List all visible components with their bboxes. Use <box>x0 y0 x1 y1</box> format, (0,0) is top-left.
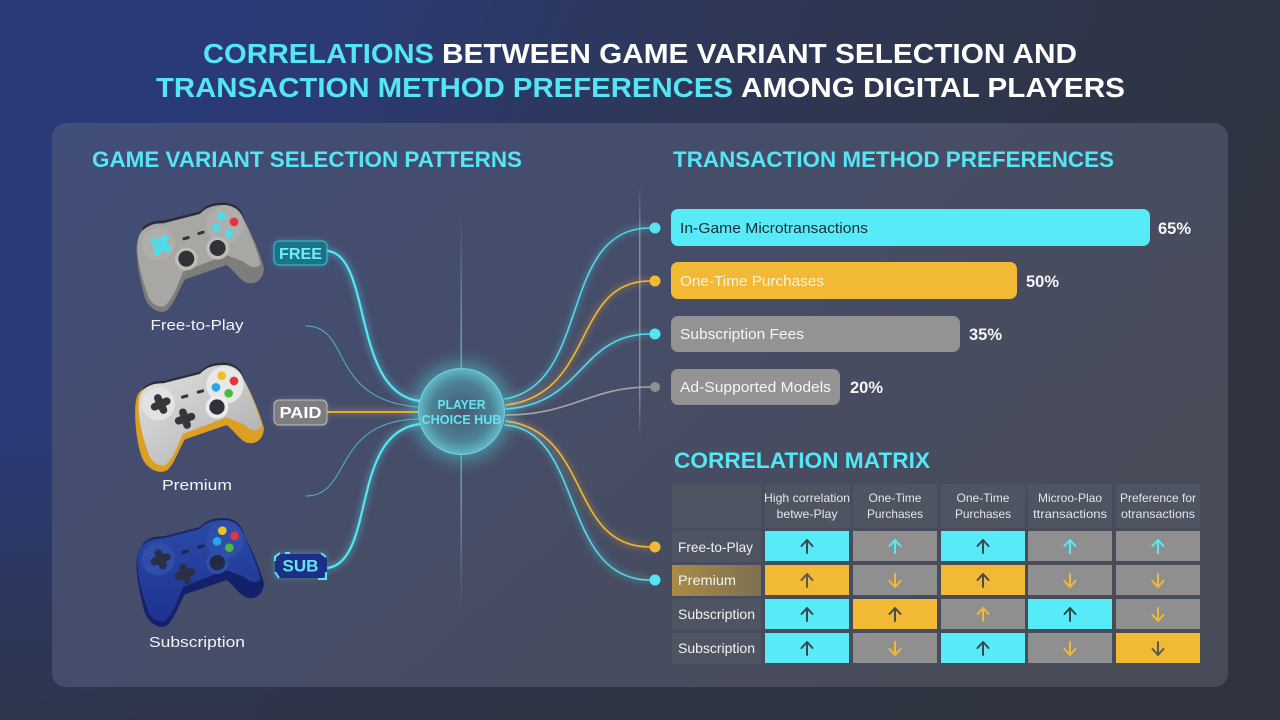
badge: free <box>274 241 327 265</box>
bar: in-game microtransactions 65%: In-Game Microtransactions <box>680 220 868 237</box>
heading: game variant selection patterns: GAME VARIANT SELECTION PATTERNS <box>92 147 522 172</box>
controller: subscription <box>137 518 264 627</box>
badge: free: FREE <box>279 246 322 263</box>
bar: in-game microtransactions 65% <box>671 209 1191 246</box>
controller: premium <box>135 363 264 472</box>
connectors: variants to hub <box>306 251 420 568</box>
matrix header row: Preference for <box>1120 491 1196 505</box>
panel: main content card <box>52 123 1228 687</box>
matrix row: premium <box>672 565 1200 596</box>
bar: in-game microtransactions 65%: 65% <box>1158 219 1191 238</box>
badge: paid: PAID <box>280 405 322 422</box>
matrix header row: Purchases <box>867 507 923 521</box>
matrix row: subscription <box>672 599 1200 630</box>
matrix header row: Microo-Plao <box>1038 491 1102 505</box>
connectors: hub to bars and matrix <box>505 228 650 580</box>
bar: ad-supported models 20% <box>671 369 883 405</box>
bar: ad-supported models 20%: Ad-Supported Models <box>680 379 831 396</box>
badge: sub: SUB <box>282 556 318 576</box>
node dots <box>650 222 660 586</box>
bar: subscription fees 35%: 35% <box>969 325 1002 344</box>
correlation matrix table <box>672 484 1200 664</box>
label: subscription: Subscription <box>149 634 245 651</box>
controller: free-to-play <box>137 203 264 312</box>
heading: correlation matrix: CORRELATION MATRIX <box>674 448 930 473</box>
heading: transaction method preferences: TRANSACTION METHOD PREFERENCES <box>673 147 1114 172</box>
title: TRANSACTION METHOD PREFERENCES <box>156 72 733 103</box>
matrix row: subscription (second): Subscription <box>678 640 755 656</box>
badge: sub <box>274 553 327 579</box>
hub: player choice hub: PLAYER <box>438 398 486 412</box>
matrix header row <box>672 484 1200 528</box>
hub: player choice hub <box>412 362 512 462</box>
matrix header row: betwe-Play <box>776 507 838 521</box>
bar: subscription fees 35%: Subscription Fees <box>680 326 804 343</box>
bar: one-time purchases 50%: One-Time Purchases <box>680 273 824 290</box>
bar: one-time purchases 50% <box>671 262 1059 299</box>
matrix header row: Purchases <box>955 507 1011 521</box>
bar chart: transaction method preferences <box>671 209 1191 405</box>
matrix header row: One-Time <box>956 491 1010 505</box>
label: free-to-play: Free-to-Play <box>150 317 244 334</box>
badge: paid <box>274 400 327 425</box>
matrix header row: High correlation <box>764 491 850 505</box>
title: CORRELATIONS <box>203 38 434 69</box>
matrix row: free-to-play: Free-to-Play <box>678 539 753 555</box>
title: BETWEEN GAME VARIANT SELECTION AND <box>442 38 1077 69</box>
hub: player choice hub: CHOICE HUB <box>422 413 502 427</box>
label: premium: Premium <box>162 477 232 494</box>
matrix row: subscription (second) <box>672 633 1200 664</box>
bar: one-time purchases 50%: 50% <box>1026 272 1059 291</box>
bar: subscription fees 35% <box>671 316 1002 352</box>
matrix row: subscription: Subscription <box>678 606 755 622</box>
bar: ad-supported models 20%: 20% <box>850 378 883 397</box>
matrix row: premium: Premium <box>678 572 736 588</box>
matrix header row: ttransactions <box>1033 507 1107 521</box>
matrix header row: otransactions <box>1121 507 1195 521</box>
title: AMONG DIGITAL PLAYERS <box>741 72 1125 103</box>
matrix row: free-to-play <box>672 531 1200 562</box>
matrix header row: One-Time <box>868 491 922 505</box>
title <box>156 38 1125 103</box>
